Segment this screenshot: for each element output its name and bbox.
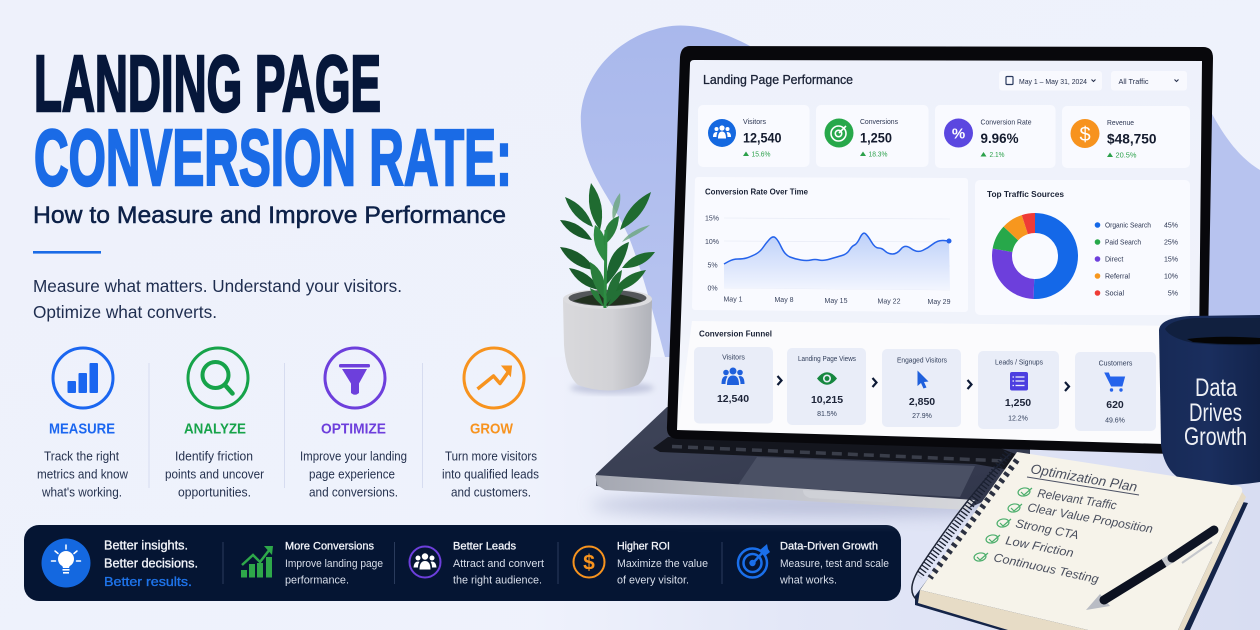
icon: dollar [574,546,604,578]
dashboard header: Landing Page Performance [703,73,853,87]
mug text: Drives [1189,399,1242,427]
funnel step: customers: Customers [1099,360,1133,368]
title: CONVERSION RATE: [34,113,512,202]
text: measure description [37,450,129,500]
stat card: revenue [1062,106,1190,168]
funnel arrow 4 [1065,382,1069,391]
heading: optimize: OPTIMIZE [321,420,386,438]
funnel step: leads and signups [978,351,1059,429]
legend: 15% [1164,256,1178,264]
funnel step: engaged visitors: 2,850 [909,396,935,408]
legend: 45% [1164,222,1178,230]
legend: Paid Search [1105,240,1141,246]
panel: measure [37,348,129,500]
handwritten checklist: Optimization Plan [1029,461,1138,495]
text: better leads: Attract and convert [453,558,544,570]
stat card: visitors [698,105,810,167]
stat card: conversion rate [935,105,1056,168]
subtitle: How to Measure and Improve Performance [33,202,506,229]
text: analyze description: Identify friction [175,450,253,464]
laptop base [595,407,1030,510]
icon: growth arrow [464,348,524,408]
text: data-driven growth: what works. [779,574,837,586]
check marks [973,487,1032,562]
text: data-driven growth [779,540,889,586]
text: better leads: Better Leads [453,540,517,552]
accent rule [33,251,101,254]
y axis labels: 0% [708,286,718,292]
text: better leads: the right audience. [453,574,542,586]
stat card: conversion rate: 9.96% [980,130,1019,146]
decorative blue blob left of laptop [581,26,760,357]
pot [563,289,652,390]
funnel arrow 1 [778,376,782,385]
text: higher roi: of every visitor. [617,574,689,586]
legend: Social [1105,290,1125,298]
tagline: Optimize what converts. [33,302,217,322]
tagline: Measure what matters. Understand your visitors. [33,276,402,296]
stat card: conversions: 1,250 [860,130,892,146]
text: better leads [453,540,544,586]
text: analyze description [165,450,264,500]
handwritten checklist [992,461,1154,586]
x axis labels [723,296,951,306]
stat card: conversion rate: % [952,126,965,142]
funnel step: engaged visitors: Engaged Visitors [897,358,947,364]
text: optimize description: page experience [309,468,395,482]
x axis labels: May 1 [723,296,743,304]
heading: measure: MEASURE [49,420,115,438]
text: grow description: and customers. [451,486,531,500]
text: higher roi: Higher ROI [617,540,670,552]
laptop screen [677,60,1202,445]
funnel step: customers: 49.6% [1105,418,1125,424]
y axis labels: 15% [705,216,719,222]
handwritten checklist: Relevant Traffic [1037,486,1118,512]
legend: 25% [1164,240,1178,246]
handwritten checklist: Continuous Testing [992,550,1100,586]
stat card: visitors: Visitors [743,119,766,126]
coffee mug [1159,315,1260,485]
icon: funnel [325,348,385,408]
y axis labels [705,216,719,292]
text: better insights: Better results. [104,574,192,589]
desk surface [530,357,1260,630]
text: better insights: Better insights. [104,538,188,552]
text: higher roi: Maximize the value [617,558,708,570]
text: analyze description: opportunities. [178,486,251,500]
x axis labels: May 8 [774,297,794,304]
text: optimize description: Improve your landing [300,450,407,464]
stat card: conversions [816,105,928,167]
chart panel: top traffic sources: Top Traffic Sources [987,189,1064,199]
x axis labels: May 22 [878,298,901,306]
title: LANDING PAGE [34,39,381,128]
leaves [560,183,655,308]
handwritten checklist: Clear Value Proposition [1026,500,1154,536]
icon: bar chart [53,348,113,408]
funnel step: visitors [694,347,773,424]
icon: chart with arrow [241,546,273,578]
date range dropdown: May 1 – May 31, 2024 [1019,77,1087,86]
legend: Direct [1105,256,1123,264]
legend: 10% [1164,274,1178,280]
legend: Referral [1105,274,1130,280]
funnel step: customers: 620 [1106,399,1124,411]
text: data-driven growth: Measure, test and scale [780,558,889,570]
funnel step: visitors: 12,540 [717,393,749,405]
stat card: conversions: Conversions [860,119,898,126]
laptop lid bezel [667,46,1213,455]
text: optimize description [300,450,407,500]
stat card: visitors: 12,540 [743,130,782,146]
funnel step: landing page views: 10,215 [811,394,843,406]
icon: magnifying glass [188,348,248,408]
funnel step: leads and signups: 1,250 [1005,397,1031,409]
stat card: conversions: 18.3% [868,152,888,158]
funnel step: leads and signups: Leads / Signups [995,360,1043,366]
x axis labels: May 29 [928,299,951,306]
date range dropdown [999,71,1102,90]
column dividers [149,363,422,488]
funnel arrow 2 [872,378,876,387]
text: better insights: Better decisions. [104,556,198,570]
panel: conversion funnel [678,321,1197,444]
chart panel: conversion rate over time [695,180,965,309]
funnel step: landing page views [787,348,866,425]
panel: grow [442,348,539,500]
decorative blue blob right of laptop [1190,112,1260,360]
panel: benefits bar [24,525,901,601]
plant in pot [560,183,655,394]
funnel step: engaged visitors: 27.9% [912,413,932,420]
panel: optimize [300,348,407,500]
notebook [912,452,1248,630]
text: more conversions: More Conversions [285,540,374,552]
stat card: revenue: 20.5% [1116,152,1136,160]
icon: dollar: $ [583,552,595,574]
funnel step: customers [1075,352,1156,431]
stat card: revenue: Revenue [1107,120,1134,127]
handwritten checklist: Strong CTA [1014,516,1080,542]
text: higher roi [617,540,708,586]
text: measure description: metrics and know [37,468,129,482]
text: data-driven growth: Data-Driven Growth [780,540,878,552]
text: analyze description: points and uncover [165,468,264,482]
funnel step: visitors: Visitors [722,354,745,362]
stat card: revenue: $ [1079,124,1091,146]
area under line [724,233,950,290]
text: grow description: Turn more visitors [445,450,537,464]
heading: grow: GROW [470,420,514,438]
chart panel: conversion rate over time: Conversion Rate Over Time [705,186,808,196]
funnel step: landing page views: Landing Page Views [798,356,856,363]
icon: light bulb [42,538,90,588]
y axis labels: 10% [705,239,719,246]
text: optimize description: and conversions. [309,486,398,500]
stat card: conversion rate: Conversion Rate [980,120,1032,126]
funnel step: landing page views: 81.5% [817,411,837,418]
mug text [1184,374,1247,451]
text: more conversions [285,540,383,586]
text: measure description: what's working. [41,486,122,500]
text: grow description: into qualified leads [442,468,539,482]
text: measure description: Track the right [44,450,119,464]
text: more conversions: performance. [285,574,349,586]
tagline [33,276,402,322]
icon: people [410,546,440,578]
traffic filter dropdown [1111,71,1187,90]
legend: 5% [1168,290,1178,298]
legend: Organic Search [1105,222,1151,230]
stat card: visitors: 15.6% [752,152,770,158]
handwritten checklist: Low Friction [1004,533,1075,560]
spiral binding [912,453,1017,600]
donut chart [1002,223,1068,289]
end point [946,238,952,244]
mug text: Data [1195,374,1237,402]
funnel step: leads and signups: 12.2% [1008,416,1028,422]
icon: target [738,544,770,578]
stat card: conversion rate: 2.1% [990,152,1004,159]
funnel arrow 3 [968,380,972,389]
funnel step: engaged visitors [882,349,961,427]
text: grow description [442,450,539,500]
stat card: revenue: $48,750 [1107,130,1157,146]
text: better insights [104,538,198,589]
panel: conversion funnel: Conversion Funnel [699,328,772,338]
y axis labels: 5% [708,262,718,270]
traffic filter dropdown: All Traffic [1118,77,1149,86]
text: more conversions: Improve landing page [285,558,383,570]
panel: analyze [165,348,264,500]
heading: analyze: ANALYZE [184,420,246,438]
chart panel: top traffic sources [975,180,1190,315]
legend [1095,222,1178,298]
title [34,39,512,202]
pen [1086,530,1214,610]
laptop [590,46,1213,517]
x axis labels: May 15 [825,298,848,305]
conversion line [724,233,949,264]
